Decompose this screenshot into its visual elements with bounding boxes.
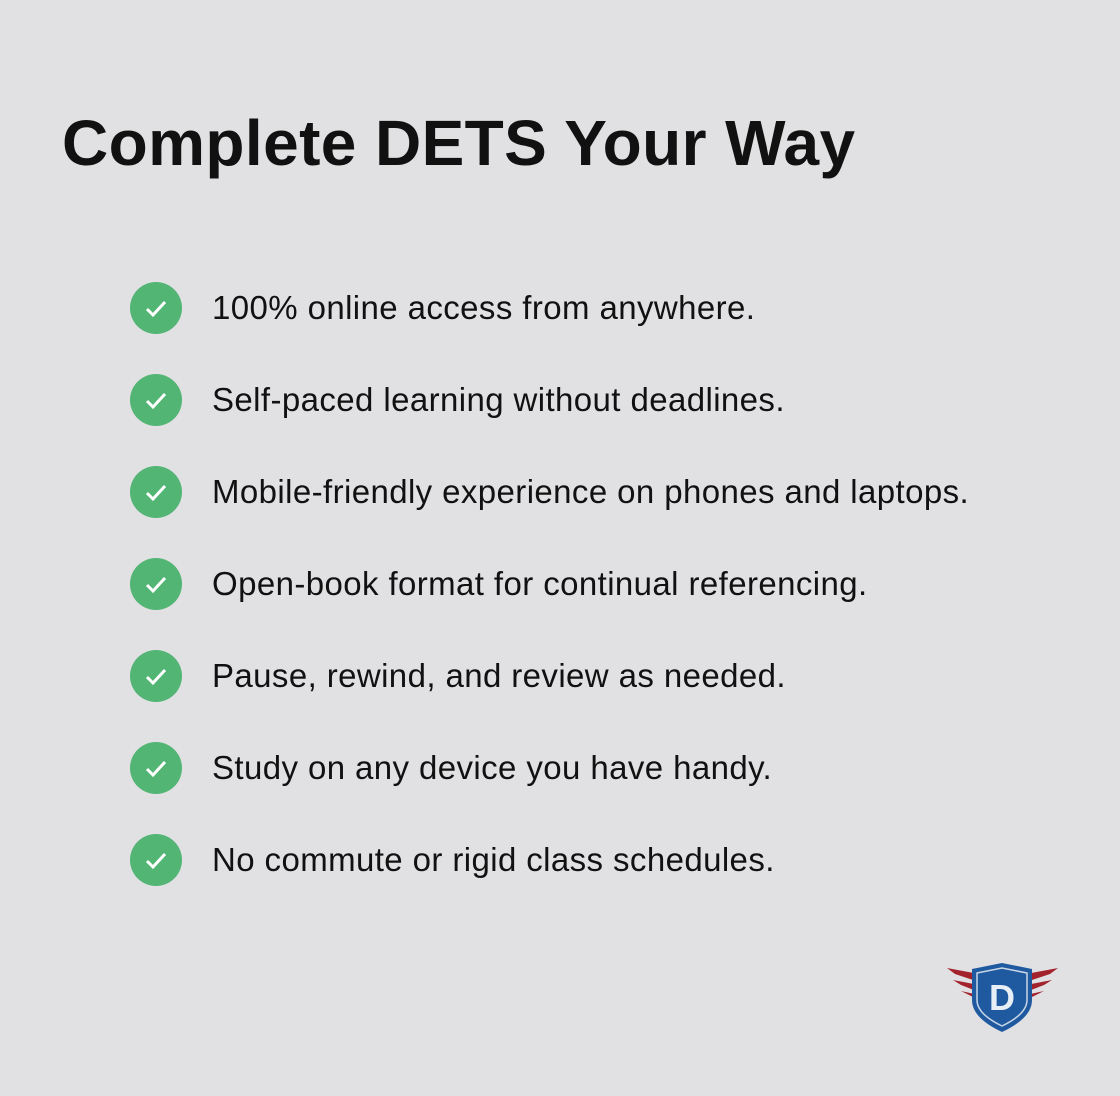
- list item 6: [130, 742, 772, 794]
- logo: shield with wings: [947, 963, 1058, 1032]
- list item 4: [130, 558, 868, 610]
- list item 6: Study on any device you have handy.: [212, 749, 772, 786]
- list item 3: [130, 466, 969, 518]
- list item 5: Pause, rewind, and review as needed.: [212, 657, 786, 694]
- title: Complete DETS Your Way: [62, 107, 856, 179]
- list item 4: Open-book format for continual referencing.: [212, 565, 868, 602]
- list item 3: Mobile-friendly experience on phones and laptops.: [212, 473, 969, 510]
- list item 5: [130, 650, 786, 702]
- logo: shield with wings: D: [989, 977, 1015, 1018]
- list item 7: No commute or rigid class schedules.: [212, 841, 775, 878]
- list item 1: [130, 282, 755, 334]
- list item 2: Self-paced learning without deadlines.: [212, 381, 785, 418]
- list item 2: [130, 374, 785, 426]
- list item 1: 100% online access from anywhere.: [212, 289, 755, 326]
- list item 7: [130, 834, 775, 886]
